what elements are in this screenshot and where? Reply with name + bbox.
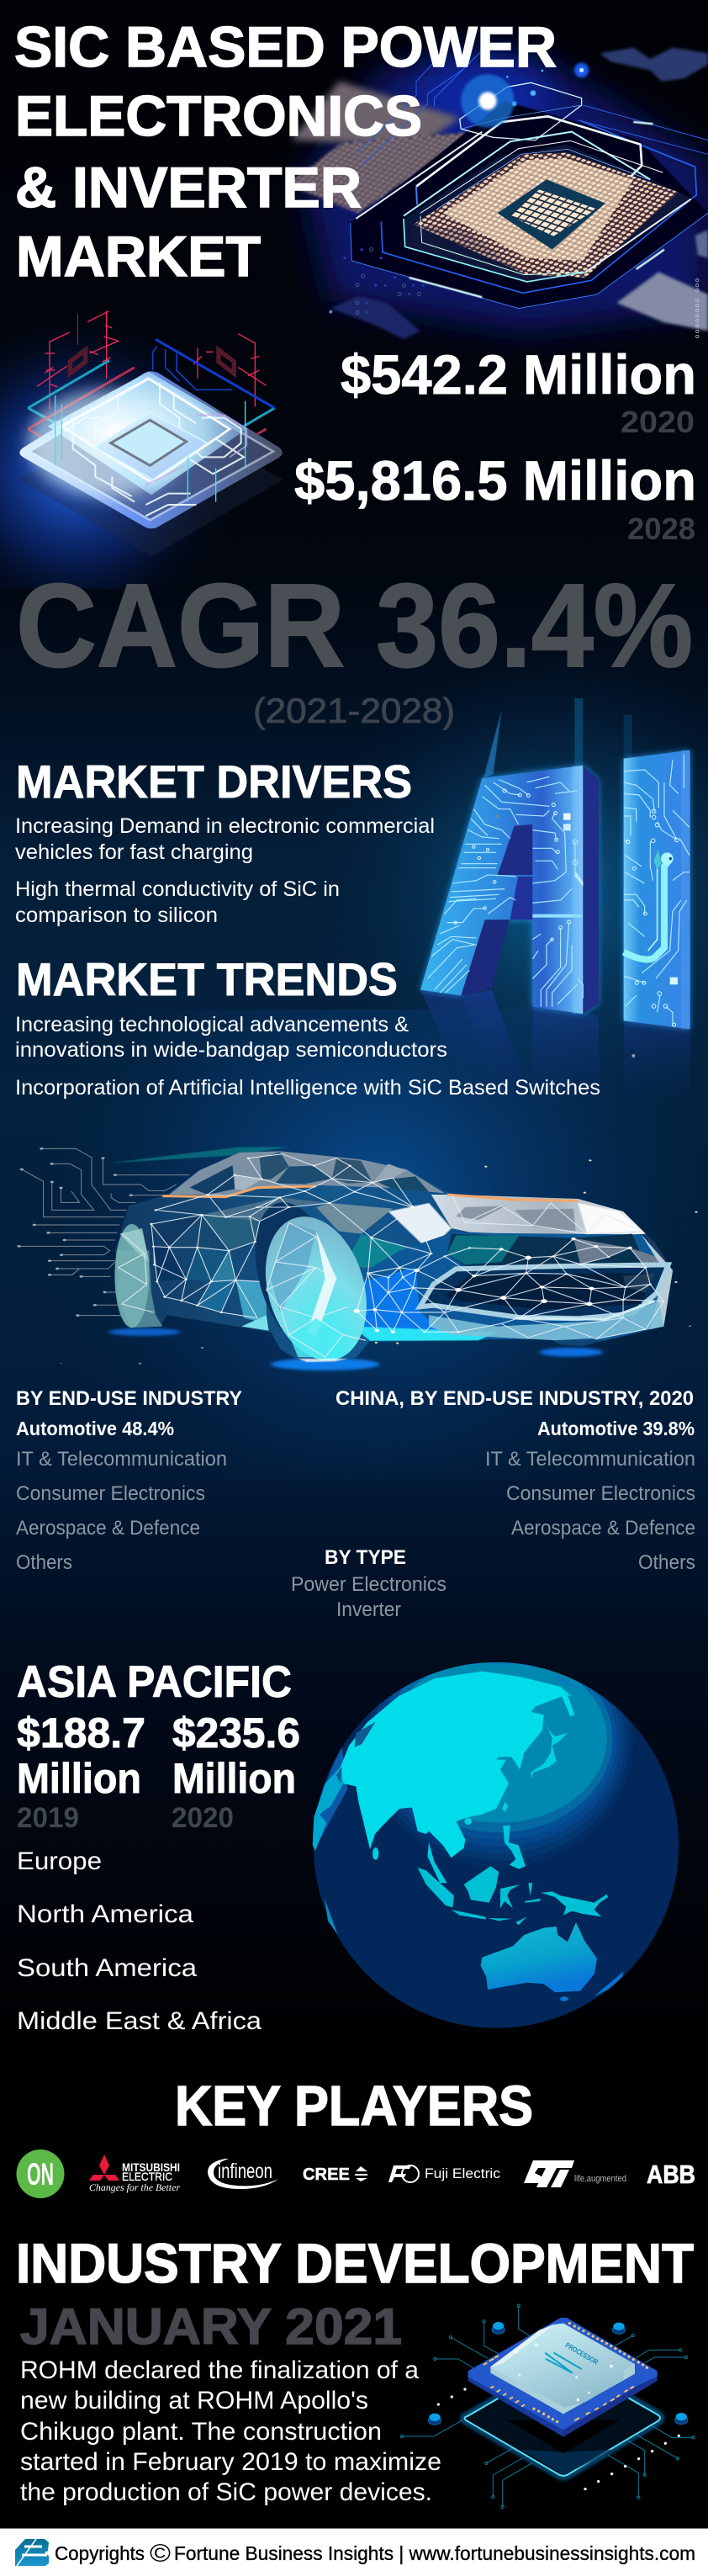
footer bar bbox=[0, 2528, 708, 2576]
speed streak bbox=[108, 1147, 289, 1163]
roof and windows bbox=[169, 1151, 445, 1195]
glowing frame bbox=[464, 2363, 660, 2476]
bright blue lower glow bbox=[347, 1268, 452, 1339]
category list: Others bbox=[16, 1551, 72, 1574]
sparkle dots bbox=[437, 2388, 680, 2490]
orange highlight bbox=[162, 1186, 578, 1201]
gold pins bbox=[483, 2356, 634, 2420]
logo: Cree: CREE bbox=[303, 2165, 350, 2184]
front tyre and wheel bbox=[242, 1199, 378, 1364]
bright upper layer bbox=[28, 390, 185, 496]
category list: IT & Telecommunication bbox=[485, 1448, 695, 1471]
logo: Mitsubishi Electric: Changes for the Better bbox=[89, 2181, 180, 2193]
value 2019: $188.7 bbox=[17, 1709, 145, 1757]
value 2019 bbox=[17, 1709, 145, 1834]
other regions list bbox=[17, 1847, 262, 2035]
teal layer bbox=[28, 360, 275, 454]
heading: market trends: MARKET TRENDS bbox=[16, 953, 398, 1005]
panel: by end-use industry bbox=[16, 1387, 242, 1574]
letter I bbox=[624, 750, 690, 1029]
title bbox=[14, 15, 557, 289]
trend 1 bbox=[15, 1013, 447, 1062]
stars bbox=[60, 1159, 698, 1365]
logo: fortune business insights bbox=[15, 2539, 49, 2566]
logo: Fuji Electric bbox=[388, 2165, 500, 2182]
development description: Chikugo plant. The construction bbox=[20, 2418, 382, 2446]
chip pad bbox=[404, 145, 691, 282]
side body shades bbox=[154, 1197, 429, 1331]
development description: new building at ROHM Apollo's bbox=[20, 2387, 368, 2414]
rear wheel bbox=[114, 1224, 162, 1328]
heat spreader bbox=[490, 2324, 635, 2414]
red circuit columns bbox=[37, 311, 267, 410]
reflections bbox=[420, 990, 690, 1102]
category list: Aerospace & Defence bbox=[16, 1517, 200, 1540]
illustration: glowing cpu chip bbox=[286, 48, 708, 339]
value 2020 bbox=[172, 1709, 300, 1834]
car body bbox=[115, 1151, 673, 1361]
logo: Mitsubishi Electric bbox=[89, 2155, 180, 2193]
triangular mesh lines bbox=[119, 1154, 663, 1357]
land: western edge and north bbox=[313, 1767, 343, 1851]
title: MARKET bbox=[16, 225, 261, 289]
development description bbox=[20, 2356, 441, 2506]
blurred background chip bbox=[286, 82, 477, 213]
highlight: automotive share: Automotive 48.4% bbox=[16, 1418, 174, 1439]
copyright line: Fortune Business Insights | www.fortunebusinessinsights.com bbox=[174, 2542, 695, 2564]
circuit wires bbox=[19, 1148, 190, 1316]
panel: by type: BY TYPE bbox=[325, 1546, 406, 1569]
category list bbox=[485, 1448, 695, 1574]
logo: Fuji Electric: Fuji Electric bbox=[425, 2165, 500, 2181]
illustration: AI circuit letters bbox=[420, 698, 690, 1102]
title: SIC BASED POWER bbox=[14, 15, 557, 79]
letter A bbox=[420, 766, 599, 1014]
other regions list: Middle East & Africa bbox=[17, 2007, 262, 2035]
heading: key players: KEY PLAYERS bbox=[175, 2075, 533, 2138]
trend 1: Increasing technological advancements & bbox=[15, 1013, 409, 1036]
copyright line: Copyrights bbox=[55, 2542, 145, 2564]
illustration: globe centred on asia pacific bbox=[313, 1662, 679, 2028]
logo: STMicroelectronics: life.augmented bbox=[574, 2174, 626, 2184]
logo: Mitsubishi Electric: ELECTRIC bbox=[122, 2170, 172, 2183]
category list: IT & Telecommunication bbox=[16, 1448, 227, 1471]
driver 2 bbox=[15, 877, 340, 927]
category list: Consumer Electronics bbox=[506, 1482, 695, 1505]
panel: industry development bbox=[16, 2232, 694, 2506]
land: islands bbox=[372, 1716, 608, 1925]
logo: ON Semiconductor bbox=[17, 2149, 64, 2198]
land: asia bbox=[341, 1672, 574, 1858]
title: & INVERTER bbox=[15, 156, 362, 220]
highlight: automotive share: Automotive 39.8% bbox=[537, 1418, 695, 1439]
other regions list: North America bbox=[17, 1900, 193, 1928]
circuit outlines bbox=[351, 50, 708, 309]
category list: Others bbox=[638, 1551, 695, 1574]
driver 2: comparison to silicon bbox=[15, 904, 218, 927]
heading: BY END-USE INDUSTRY bbox=[16, 1387, 242, 1410]
shadow plate bbox=[18, 410, 283, 557]
value 2020: Million bbox=[172, 1755, 296, 1802]
category list: Aerospace & Defence bbox=[511, 1517, 695, 1540]
cyan verticals bbox=[55, 395, 246, 502]
traces bbox=[400, 2304, 695, 2509]
market size figures: $5,816.5 Million bbox=[294, 449, 696, 511]
driver 1 bbox=[15, 814, 435, 864]
development description: the production of SiC power devices. bbox=[20, 2478, 432, 2506]
illustration: processor chip bbox=[400, 2304, 695, 2509]
dot trail bbox=[329, 248, 425, 314]
company logos row bbox=[17, 2149, 695, 2198]
logo: STMicroelectronics bbox=[524, 2160, 626, 2187]
development description: started in February 2019 to maximize bbox=[20, 2448, 441, 2476]
highlight on windshield bbox=[388, 1203, 452, 1251]
driver 1: Increasing Demand in electronic commercial bbox=[15, 814, 435, 838]
cagr: (2021-2028) bbox=[253, 691, 455, 730]
front fascia bbox=[346, 1232, 673, 1340]
driver 1: vehicles for fast charging bbox=[15, 840, 253, 864]
hood bbox=[431, 1195, 646, 1238]
illustration: polygon mesh car bbox=[17, 1147, 698, 1370]
logo: Infineon bbox=[208, 2159, 278, 2189]
market size figures bbox=[294, 343, 696, 546]
grille bbox=[420, 1264, 668, 1318]
top chip die bbox=[95, 412, 208, 480]
logo: Mitsubishi Electric: MITSUBISHI bbox=[122, 2160, 180, 2174]
panel: by type bbox=[291, 1546, 446, 1621]
logo: ABB: ABB bbox=[647, 2160, 695, 2189]
title: ELECTRONICS bbox=[15, 84, 422, 148]
trend 1: innovations in wide-bandgap semiconductors bbox=[15, 1038, 447, 1062]
chip die bbox=[498, 179, 605, 250]
value 2020: $235.6 bbox=[172, 1709, 300, 1757]
panel: market drivers bbox=[15, 755, 435, 927]
illustration: layered isometric chip bbox=[0, 303, 303, 589]
mesh nodes bbox=[150, 1158, 652, 1333]
market size figures: 2028 bbox=[627, 511, 695, 546]
heading: market drivers: MARKET DRIVERS bbox=[16, 755, 412, 808]
driver 2: High thermal conductivity of SiC in bbox=[15, 877, 340, 901]
trend 2: Incorporation of Artificial Intelligence with SiC Based Switches bbox=[15, 1076, 600, 1100]
other regions list: Europe bbox=[17, 1847, 102, 1875]
category list: Consumer Electronics bbox=[16, 1482, 205, 1505]
value 2019: 2019 bbox=[17, 1802, 79, 1834]
development description: ROHM declared the finalization of a bbox=[20, 2356, 419, 2384]
value 2019: Million bbox=[17, 1755, 141, 1802]
date: january 2021: JANUARY 2021 bbox=[20, 2298, 402, 2355]
market size figures: 2020 bbox=[621, 405, 695, 439]
base plate bbox=[19, 371, 283, 528]
value 2020: 2020 bbox=[172, 1802, 234, 1834]
copyright line bbox=[55, 2540, 695, 2568]
panel: by type: Inverter bbox=[336, 1598, 401, 1621]
other regions list: South America bbox=[17, 1954, 197, 1982]
glow lights bbox=[461, 63, 589, 128]
panel: by type: Power Electronics bbox=[291, 1573, 446, 1596]
heat spreader: PROCESSOR bbox=[564, 2340, 600, 2367]
buttons bbox=[428, 2322, 688, 2425]
logo: Infineon: infineon bbox=[218, 2160, 272, 2183]
logo: ON Semiconductor: ON bbox=[27, 2157, 54, 2192]
panel: market trends bbox=[15, 953, 600, 1100]
panel: asia pacific bbox=[17, 1657, 300, 2035]
heading: CHINA, BY END-USE INDUSTRY, 2020 bbox=[336, 1387, 694, 1410]
heading: asia pacific: ASIA PACIFIC bbox=[17, 1657, 292, 1707]
chip plate bbox=[468, 2318, 658, 2437]
ocean bands bbox=[320, 1662, 633, 1868]
panel: china by end-use industry bbox=[336, 1387, 695, 1574]
category list bbox=[16, 1448, 227, 1574]
land: australia bbox=[481, 1922, 597, 1992]
market size figures: $542.2 Million bbox=[341, 343, 696, 405]
copyright line: © bbox=[150, 2540, 171, 2568]
